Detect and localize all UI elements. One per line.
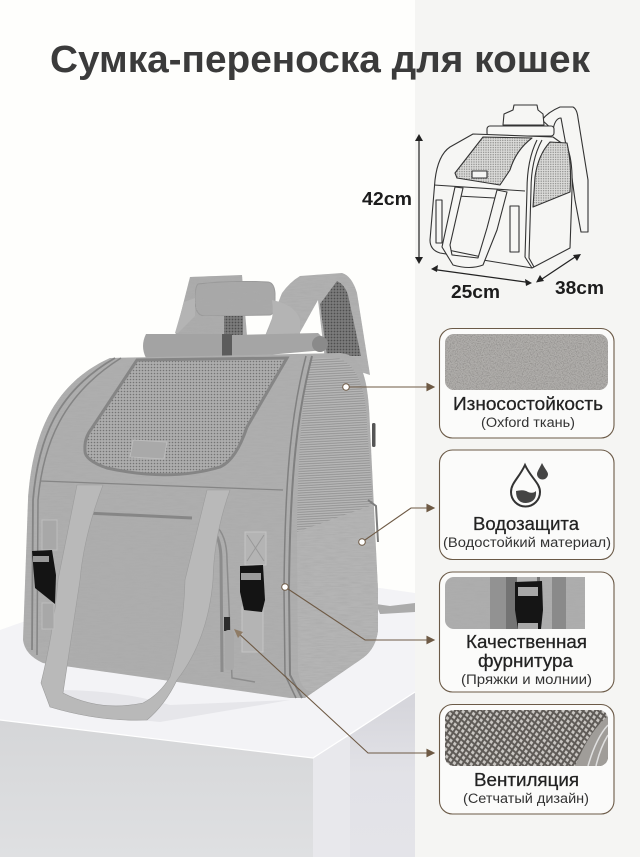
left buckle outline <box>436 200 442 243</box>
body edge seam <box>32 358 121 655</box>
top handle base <box>175 275 247 336</box>
callout arrow: durability <box>343 384 434 390</box>
icon: water drops <box>511 463 548 506</box>
roll handle end <box>312 336 328 352</box>
subtext: (Водостойкий материал) <box>443 535 611 550</box>
handle loop left <box>175 298 195 333</box>
shoulder strap <box>265 273 370 375</box>
heading: Износостойкость <box>453 394 603 414</box>
front pocket <box>72 515 190 677</box>
top handle outline <box>503 105 544 125</box>
strap outline <box>442 187 507 268</box>
right buckle outline <box>510 206 519 252</box>
title: Сумка-переноска для кошек <box>50 39 591 81</box>
subtext: (Пряжки и молнии) <box>461 672 592 687</box>
card: hardware <box>440 572 614 692</box>
width arrow <box>431 265 532 286</box>
callout arrow: water protection <box>359 504 434 545</box>
callout arrow: ventilation <box>234 629 434 756</box>
flap mesh outline <box>455 137 532 185</box>
flap label outline <box>472 171 487 178</box>
pocket zipper <box>86 513 192 518</box>
back strap hanging <box>376 603 415 614</box>
handle grip <box>195 281 275 316</box>
subtext: (Сетчатый дизайн) <box>463 791 589 806</box>
subtext: (Oxford ткань) <box>481 415 575 430</box>
side zipper <box>213 525 255 682</box>
card: durability <box>440 328 614 438</box>
left buckle <box>32 520 57 629</box>
side seam <box>284 356 312 698</box>
heading: Водозащита <box>473 514 580 534</box>
zipper pull <box>224 617 234 670</box>
main body <box>23 353 378 698</box>
height label: 42cm <box>362 188 412 209</box>
side arch <box>525 140 542 268</box>
heading line 1: Качественная <box>466 632 587 652</box>
handle loop right <box>265 300 300 336</box>
front seam <box>434 185 525 191</box>
shoulder strap mesh <box>320 281 361 356</box>
inner handle mesh <box>224 315 243 337</box>
carry straps <box>41 485 230 720</box>
back side dark tab <box>372 423 376 447</box>
right buckle <box>240 532 266 652</box>
card: ventilation <box>440 704 614 814</box>
flap label <box>130 440 167 459</box>
dimensions diagram <box>362 105 604 302</box>
side pocket <box>297 505 378 692</box>
mesh photo <box>445 710 608 766</box>
fabric swatch <box>445 334 608 390</box>
width label: 25cm <box>451 281 500 302</box>
mesh flap <box>85 358 287 475</box>
shoulder strap outline <box>542 107 588 232</box>
roll handle left <box>143 334 222 358</box>
line drawing of backpack <box>430 105 588 268</box>
pocket outline <box>448 196 495 257</box>
card: water protection <box>440 450 614 560</box>
side mesh outline <box>533 142 571 207</box>
body outline <box>430 134 572 268</box>
callout arrow: hardware <box>282 584 434 644</box>
pedestal <box>0 588 415 857</box>
heading: Вентиляция <box>474 770 579 790</box>
horizontal seam <box>40 481 283 490</box>
depth label: 38cm <box>555 277 604 298</box>
side pocket zipper <box>368 500 378 542</box>
depth arrow <box>536 254 581 282</box>
buckle photo <box>445 577 585 629</box>
height arrow <box>415 134 423 264</box>
cat carrier backpack <box>23 273 415 720</box>
roll handle outline <box>487 126 554 136</box>
side mesh panel <box>297 358 373 532</box>
roll handle right <box>232 333 325 358</box>
heading line 2: фурнитура <box>478 651 574 671</box>
roll handle gap <box>222 334 232 358</box>
